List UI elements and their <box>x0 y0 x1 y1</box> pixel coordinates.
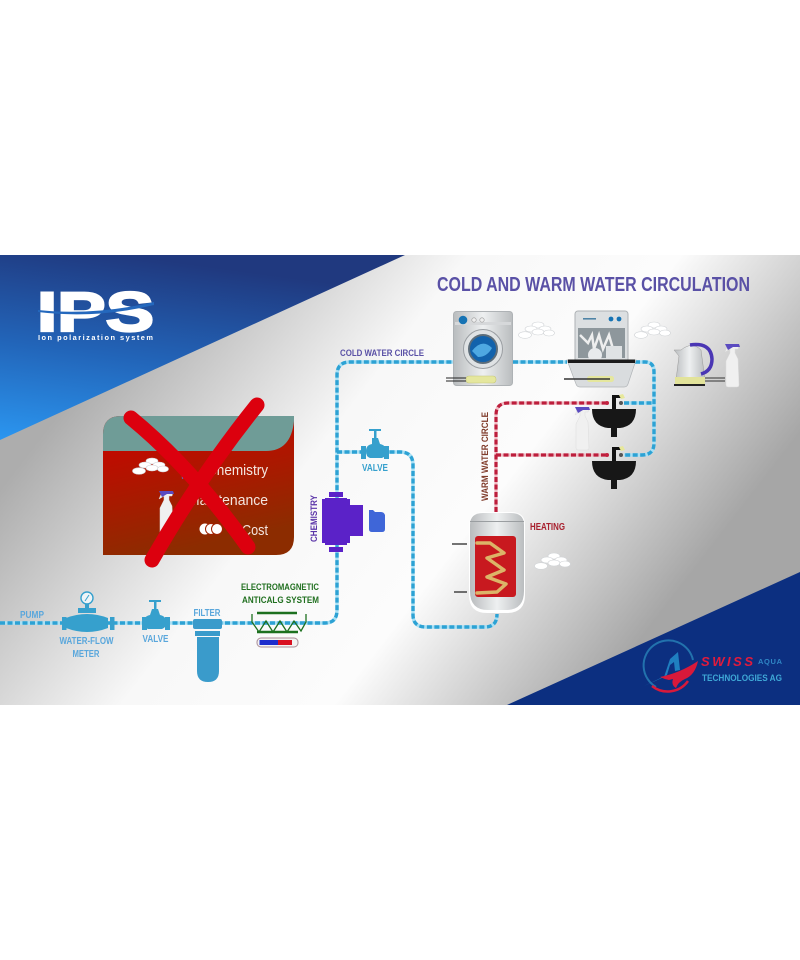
water-flow meter <box>62 592 114 632</box>
Swiss Aqua logo: SWISS <box>701 654 753 669</box>
valve upper <box>361 429 389 459</box>
chemistry label: CHEMISTRY <box>309 494 320 542</box>
anticalg device <box>252 613 306 647</box>
filter label: FILTER <box>194 608 221 619</box>
Swiss Aqua logo: TECHNOLOGIES AG <box>702 673 782 683</box>
pump label: PUMP <box>20 610 44 621</box>
filter <box>193 619 222 682</box>
red panel with crossed-out costs: Cost <box>242 522 269 539</box>
warm water circle label: WARM WATER CIRCLE <box>480 412 490 501</box>
tablets <box>534 553 570 569</box>
Swiss Aqua logo <box>644 640 783 691</box>
spray bottle <box>725 344 740 387</box>
water-flow meter label <box>60 636 114 660</box>
heating label: HEATING <box>530 522 565 533</box>
spray bottle middle <box>575 407 590 450</box>
sink upper <box>592 394 636 437</box>
blue corner top left <box>0 255 405 440</box>
washing machine <box>446 312 512 386</box>
water-flow meter label: WATER-FLOW <box>60 636 114 647</box>
warm water pipes <box>496 403 606 512</box>
valve lower <box>142 600 170 630</box>
electromagnetic label <box>241 582 319 606</box>
red cross <box>131 405 257 560</box>
tablets <box>518 322 554 338</box>
cold water circle label: COLD WATER CIRCLE <box>340 348 424 358</box>
electromagnetic label: ELECTROMAGNETIC <box>241 582 319 593</box>
Swiss Aqua logo: AQUA <box>758 657 783 666</box>
kettle <box>674 345 725 386</box>
water-flow meter label: METER <box>72 649 100 660</box>
electromagnetic label: ANTICALG SYSTEM <box>242 595 319 606</box>
red panel with crossed-out costs: Maintenance <box>188 492 268 509</box>
IPS logo: IPS <box>37 280 154 343</box>
valve label lower: VALVE <box>142 634 169 645</box>
dishwasher <box>564 311 636 387</box>
chemistry unit <box>322 492 363 552</box>
blue corner bottom right <box>507 572 800 705</box>
sink lower <box>592 446 636 489</box>
IPS logo: Ion polarization system <box>38 333 153 342</box>
heating tank <box>452 512 525 613</box>
chemistry jug <box>369 510 385 532</box>
cold water pipes <box>0 362 654 627</box>
red panel with crossed-out costs: Chemistry <box>207 462 268 479</box>
valve label: VALVE <box>362 463 388 474</box>
red panel with crossed-out costs <box>103 405 294 560</box>
tablets <box>634 322 670 338</box>
background panel <box>0 255 800 705</box>
